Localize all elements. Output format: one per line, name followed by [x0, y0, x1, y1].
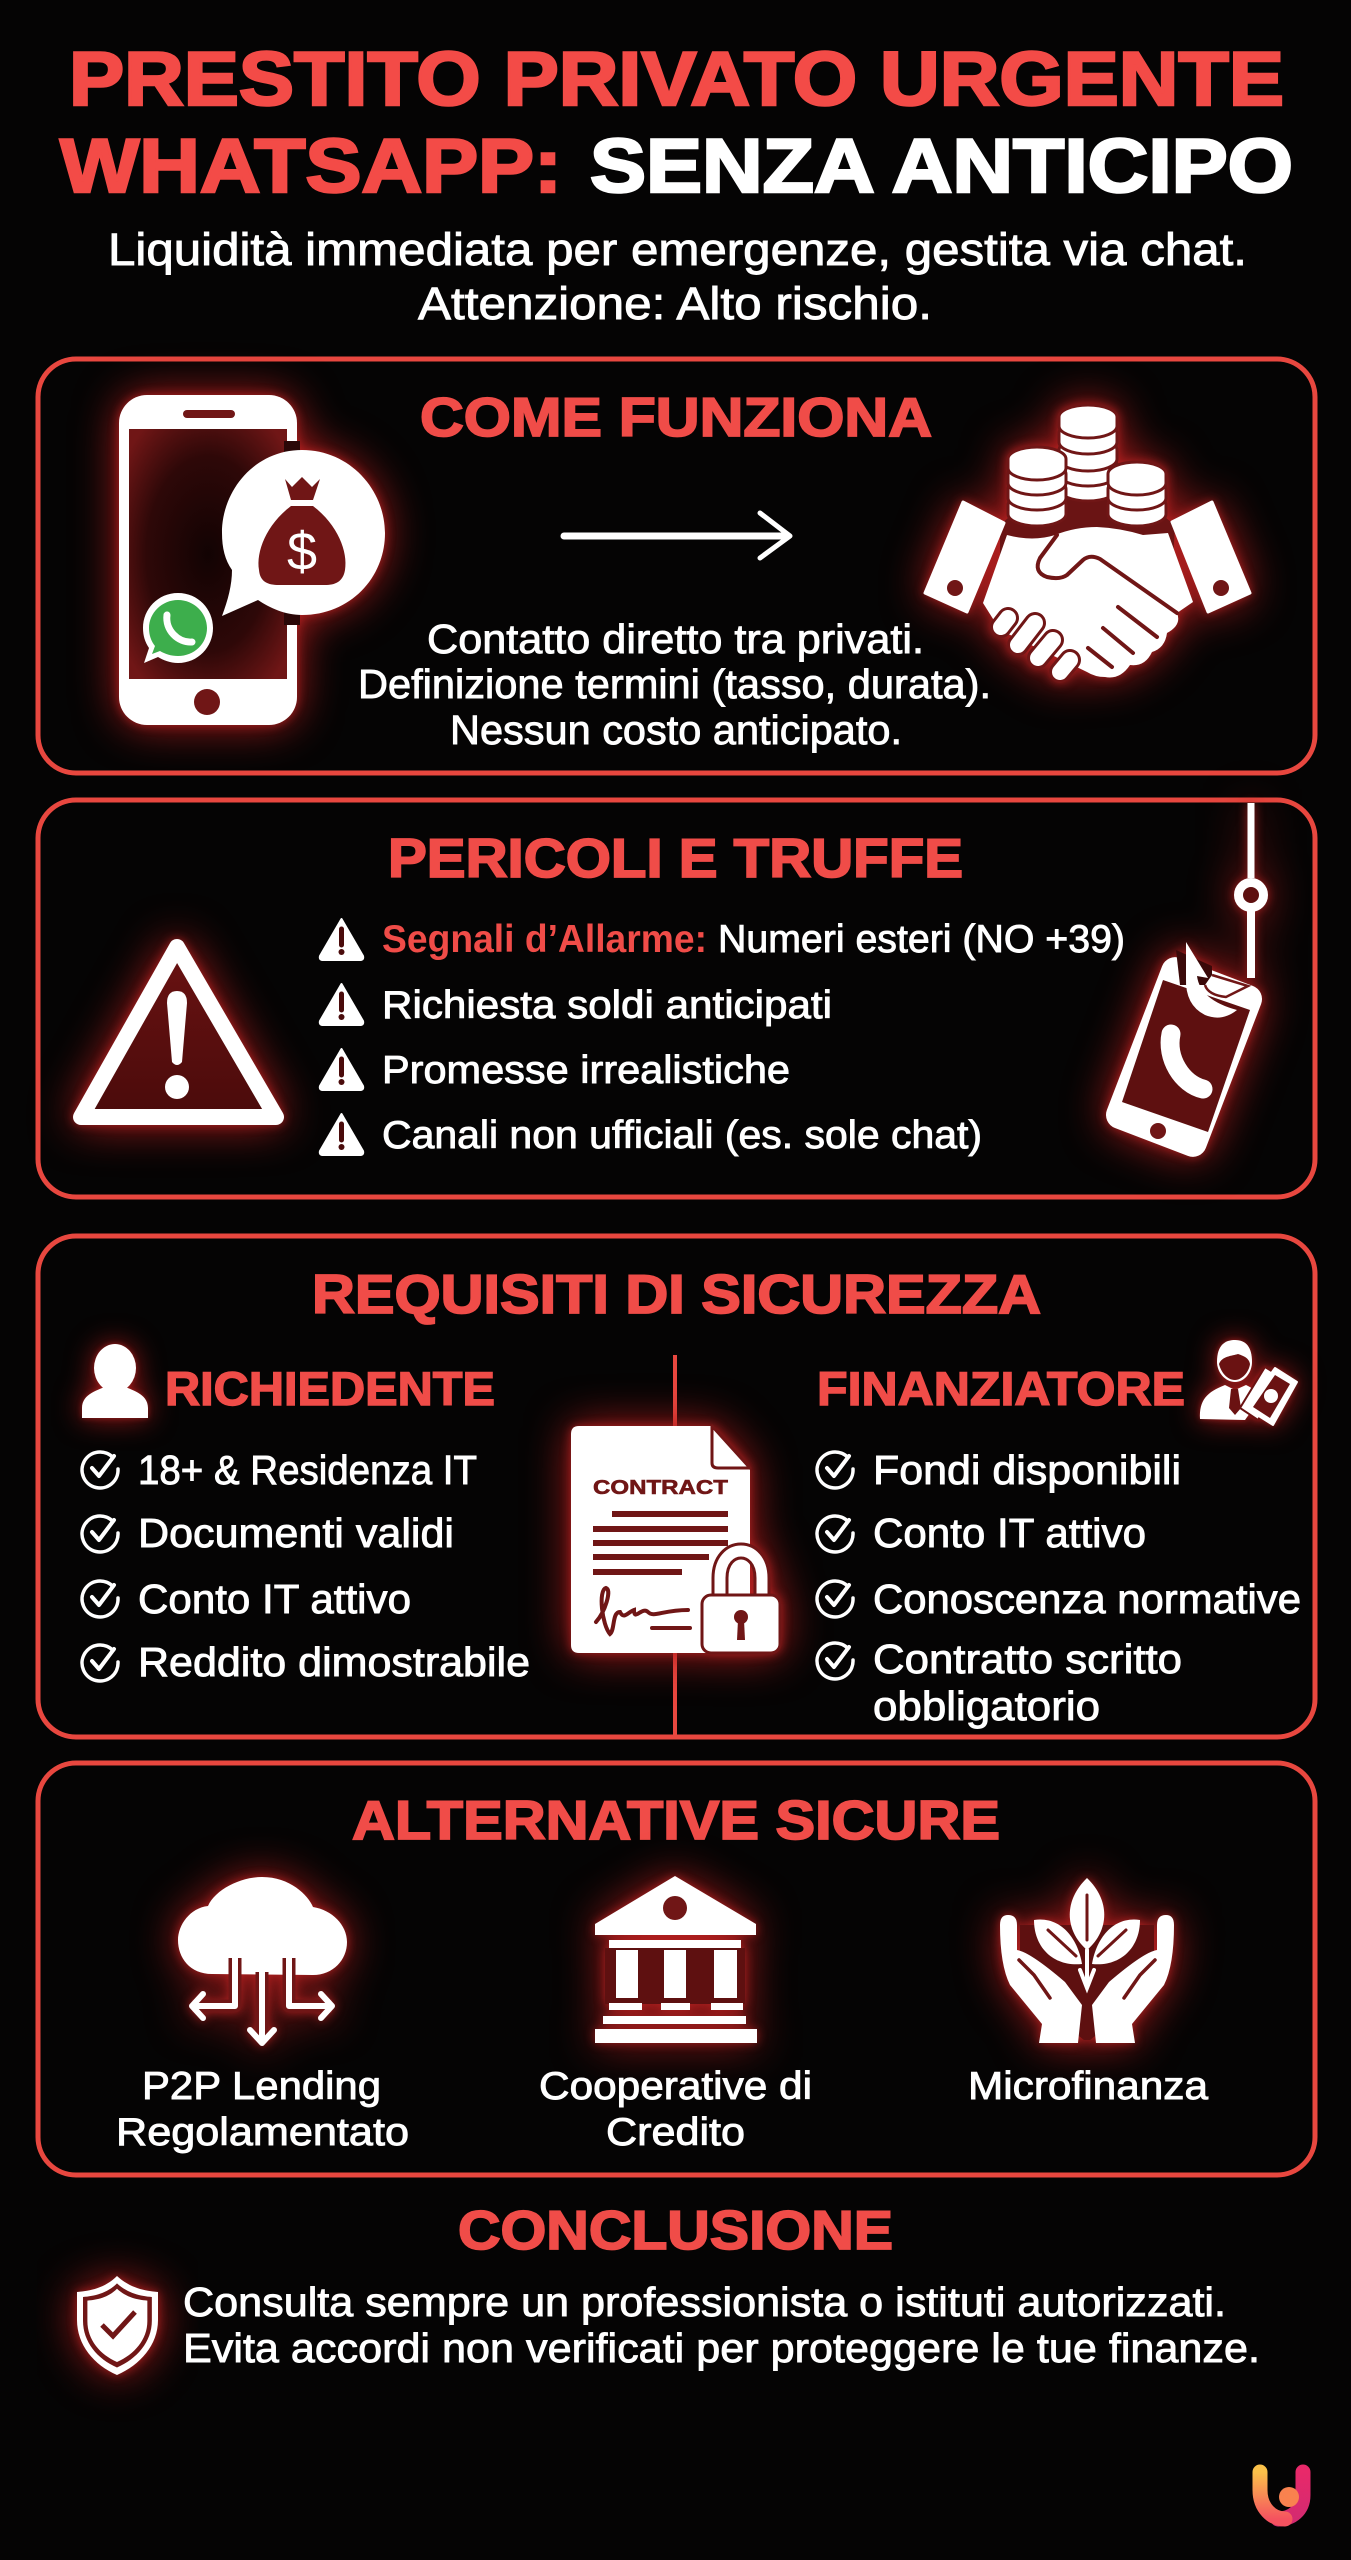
label: microfinanza: Microfinanza	[968, 2065, 1208, 2108]
icon: phone with money bubble and WhatsApp: $	[287, 522, 317, 582]
subtitle: Attenzione: Alto rischio.	[418, 278, 932, 329]
list: richiedente	[82, 1447, 530, 1685]
item: canali: Canali non ufficiali (es. sole chat)	[382, 1114, 982, 1157]
label: cooperative	[539, 2065, 812, 2154]
panel: come funziona	[38, 359, 1315, 773]
heading: alternative: ALTERNATIVE SICURE	[352, 1789, 1000, 1851]
heading: conclusione: CONCLUSIONE	[458, 2199, 893, 2261]
icon: shield	[77, 2276, 158, 2375]
panel: requisiti di sicurezza	[38, 1236, 1315, 1737]
title: SENZA ANTICIPO	[590, 124, 1293, 209]
title: WHATSAPP:	[60, 124, 562, 209]
list: finanziatore	[817, 1447, 1301, 1729]
icon: financier with money	[1200, 1340, 1297, 1425]
icon: person	[82, 1344, 148, 1418]
text: how it works: Definizione termini (tasso, durata).	[358, 661, 991, 707]
text: how it works: Nessun costo anticipato.	[450, 707, 902, 753]
text: conclusion: Evita accordi non verificati per proteggere le tue finanze.	[183, 2325, 1260, 2371]
warning list	[320, 918, 1125, 1157]
text: how it works: Contatto diretto tra privati.	[427, 616, 924, 662]
label: p2p lending: Regolamentato	[116, 2111, 409, 2154]
subheading: finanziatore: FINANZIATORE	[817, 1362, 1185, 1415]
center divider	[673, 1355, 677, 1736]
heading: pericoli e truffe: PERICOLI E TRUFFE	[388, 827, 963, 889]
icon: hooked phone	[1102, 803, 1266, 1161]
text: conclusion	[183, 2279, 1260, 2371]
list: finanziatore: Conto IT attivo	[873, 1510, 1146, 1556]
item: segnali d'allarme: Segnali d’Allarme:	[382, 918, 707, 961]
list: richiedente: Documenti validi	[138, 1510, 454, 1556]
item: segnali d'allarme	[320, 918, 1125, 961]
item: segnali d'allarme: Numeri esteri (NO +39)	[718, 918, 1125, 961]
list: finanziatore: Conoscenza normative	[873, 1576, 1301, 1622]
icon: contract with lock	[571, 1426, 780, 1653]
item: richiesta soldi: Richiesta soldi anticipati	[382, 984, 832, 1027]
list: finanziatore: obbligatorio	[873, 1683, 1100, 1729]
label: p2p lending	[116, 2065, 409, 2154]
text: how it works	[358, 616, 991, 753]
icon: hands with plant	[1000, 1878, 1174, 2043]
heading: requisiti: REQUISITI DI SICUREZZA	[312, 1263, 1041, 1325]
subtitle: Liquidità immediata per emergenze, gestita via chat.	[108, 224, 1247, 275]
icon: contract with lock: CONTRACT	[593, 1477, 728, 1499]
list: richiedente: Conto IT attivo	[138, 1576, 411, 1622]
list: richiedente: 18+ & Residenza IT	[138, 1447, 477, 1493]
icon: bank	[595, 1876, 757, 2043]
icon: warning triangle	[81, 947, 276, 1117]
title	[60, 37, 1293, 209]
label: cooperative: Cooperative di	[539, 2065, 812, 2108]
label: cooperative: Credito	[606, 2111, 745, 2154]
subheading: richiedente: RICHIEDENTE	[165, 1362, 495, 1415]
list: richiedente: Reddito dimostrabile	[138, 1639, 530, 1685]
arrow	[564, 513, 790, 558]
list: finanziatore: Fondi disponibili	[873, 1447, 1181, 1493]
text: conclusion: Consulta sempre un professionista o istituti autorizzati.	[183, 2279, 1226, 2325]
panel: pericoli e truffe	[38, 800, 1315, 1197]
list: finanziatore: Contratto scritto	[873, 1636, 1182, 1682]
panel: alternative sicure	[38, 1763, 1315, 2175]
heading: come funziona: COME FUNZIONA	[420, 386, 932, 448]
item: promesse: Promesse irrealistiche	[382, 1049, 790, 1092]
icon: phone with money bubble and WhatsApp	[119, 395, 385, 725]
label: p2p lending: P2P Lending	[142, 2065, 381, 2108]
icon: cloud	[178, 1877, 347, 2043]
icon: logo	[1260, 2472, 1303, 2519]
icon: handshake with coins	[925, 405, 1250, 678]
subtitle	[108, 224, 1247, 329]
title: PRESTITO PRIVATO URGENTE	[69, 37, 1284, 122]
